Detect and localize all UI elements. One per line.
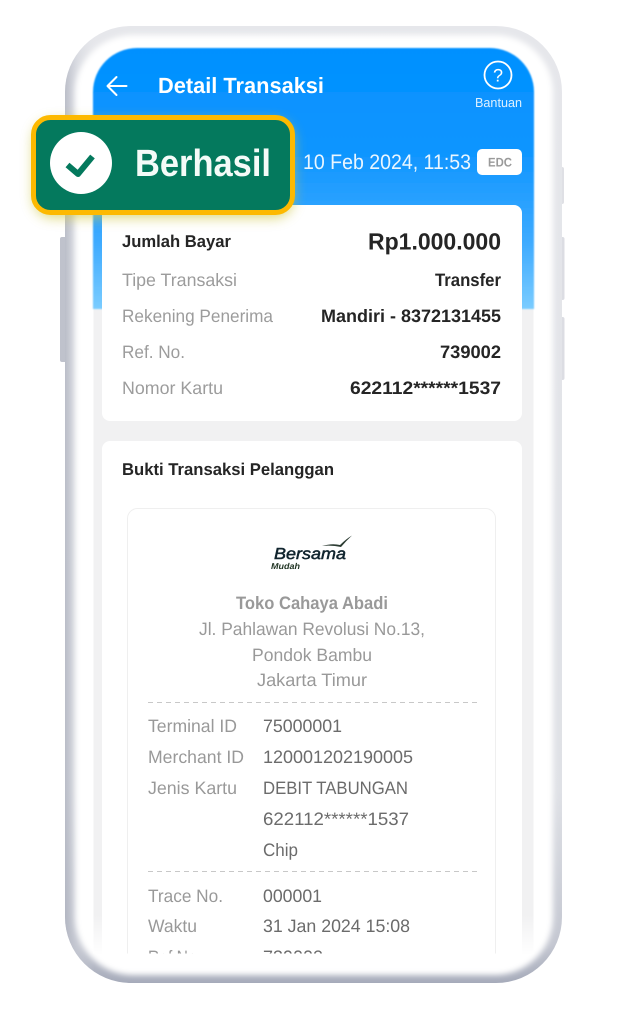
phone body	[60, 26, 564, 983]
row: transaction type: Transfer	[435, 270, 501, 290]
row: reference number: Ref. No.	[122, 342, 185, 362]
merchant name and address: Pondok Bambu	[252, 645, 372, 665]
receipt details: trace and time: 739002	[263, 947, 323, 967]
receipt details: terminal and card: 75000001	[263, 716, 342, 736]
logo: Bersama Mudah: Mudah	[271, 561, 300, 571]
icon: help	[484, 62, 512, 88]
receipt details: terminal and card: Merchant ID	[148, 747, 244, 767]
merchant name and address	[199, 593, 425, 690]
row: card number: 622112******1537	[350, 378, 501, 398]
status text: Berhasil	[135, 143, 271, 185]
icon: help: ?	[493, 66, 503, 86]
row: reference number: 739002	[440, 342, 501, 362]
receipt details: terminal and card: Terminal ID	[148, 716, 237, 736]
screen	[93, 48, 534, 988]
row: transaction type	[122, 273, 501, 290]
panel: payment summary	[102, 205, 522, 421]
row: card number	[124, 381, 500, 394]
receipt details: trace and time: 000001	[263, 886, 322, 906]
amount label: Jumlah Bayar	[122, 232, 231, 251]
EDC badge: EDC	[488, 156, 512, 170]
merchant name and address: Toko Cahaya Abadi	[236, 593, 388, 613]
receipt details: terminal and card: Jenis Kartu	[148, 778, 237, 798]
row: recipient account	[123, 309, 500, 326]
back arrow icon	[108, 77, 126, 95]
receipt details: terminal and card: DEBIT TABUNGAN	[263, 778, 408, 798]
side buttons	[60, 167, 564, 380]
receipt details: trace and time: 31 Jan 2024 15:08	[263, 916, 410, 936]
status badge: Berhasil	[33, 118, 294, 218]
panel: customer receipt	[102, 441, 522, 988]
receipt heading: Bukti Transaksi Pelanggan	[122, 460, 334, 479]
receipt details: terminal and card	[148, 716, 413, 860]
receipt details: terminal and card: 622112******1537	[263, 809, 409, 829]
row: card number: Nomor Kartu	[122, 378, 223, 398]
transaction date: 10 Feb 2024, 11:53	[303, 151, 471, 174]
receipt outline	[128, 508, 496, 988]
row: recipient account: Mandiri - 8372131455	[321, 306, 501, 326]
help label: Bantuan	[475, 95, 522, 110]
receipt details: terminal and card: Chip	[263, 840, 298, 860]
merchant name and address: Jl. Pahlawan Revolusi No.13,	[199, 619, 425, 639]
receipt details: trace and time: Waktu	[148, 916, 197, 936]
blue header	[93, 48, 534, 309]
receipt details: terminal and card: 120001202190005	[263, 747, 413, 767]
row: reference number	[123, 345, 500, 358]
merchant name and address: Jakarta Timur	[257, 670, 367, 690]
screen title: Detail Transaksi	[158, 73, 324, 98]
logo: Bersama Mudah	[271, 536, 352, 571]
receipt details: trace and time: Ref No.	[148, 947, 201, 967]
EDC badge	[477, 149, 522, 175]
amount value: Rp1.000.000	[368, 228, 501, 254]
icon: check circle	[50, 132, 112, 194]
row: recipient account: Rekening Penerima	[122, 306, 274, 326]
receipt details: trace and time: Trace No.	[148, 886, 223, 906]
logo: Bersama Mudah: Bersama	[274, 546, 346, 563]
row: transaction type: Tipe Transaksi	[122, 270, 237, 290]
receipt details: trace and time	[148, 889, 410, 954]
